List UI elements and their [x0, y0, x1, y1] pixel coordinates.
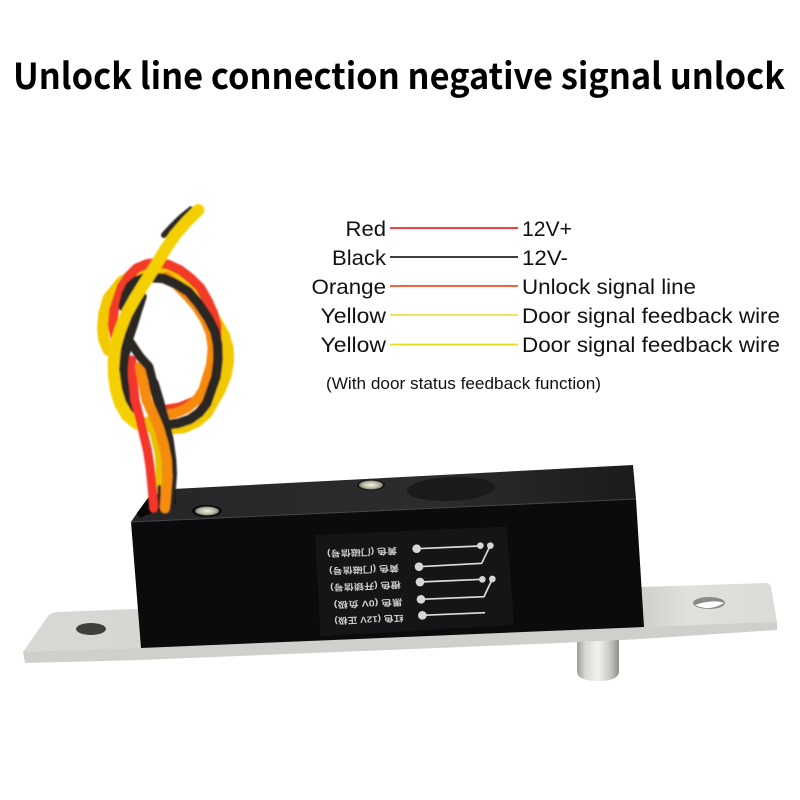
left mounting hole: [76, 623, 106, 635]
legend row: orange unlock signal line: Unlock signal line: [522, 275, 696, 299]
wiring legend: [312, 217, 780, 393]
legend row: yellow door signal feedback wire: Door signal feedback wire: [522, 304, 780, 328]
legend row: black 12V-: [332, 246, 568, 270]
top screw left: [192, 505, 222, 517]
black wire tip: [164, 209, 191, 235]
legend row: orange unlock signal line: [312, 275, 696, 299]
legend row: black 12V-: 12V-: [522, 246, 568, 270]
front top edge highlight: [131, 499, 636, 522]
legend row: yellow door signal feedback wire: [320, 304, 780, 328]
lock body: [131, 465, 644, 648]
top sensor window: [407, 475, 495, 503]
wire bundle: [103, 209, 228, 508]
black wire loop: [123, 278, 218, 425]
circuit traces: [417, 546, 492, 615]
label panel: [315, 527, 514, 636]
lower red strand: [132, 360, 154, 508]
upside-down Chinese wire labels: 黑色 (0V 负极): [334, 597, 403, 611]
circuit terminals: [412, 542, 496, 620]
legend row: yellow door signal feedback wire 2: Yellow: [320, 334, 387, 357]
legend row: yellow door signal feedback wire: Yellow: [320, 305, 387, 328]
top face: [131, 465, 636, 522]
legend row: red 12V+: Red: [346, 218, 386, 241]
upside-down Chinese wire labels: 黄色 (门磁信号): [327, 546, 397, 560]
mounting plate: [23, 583, 777, 663]
legend row: yellow door signal feedback wire 2: Door signal feedback wire: [522, 333, 780, 357]
black wire inner left strand: [123, 297, 142, 420]
yellow wire front strand: [114, 210, 198, 424]
lower orange strand: [140, 367, 167, 508]
upside-down Chinese wire labels: 黄色 (门磁信号): [329, 563, 399, 577]
legend note: (With door status feedback function): [326, 375, 601, 393]
red wire upper loop: [113, 263, 217, 337]
legend row: orange unlock signal line: Orange: [312, 276, 386, 299]
wiring diagram label: [315, 527, 514, 636]
wire entry hole: [137, 490, 176, 518]
red wire lower loop: [163, 390, 210, 410]
title: Unlock line connection negative signal unlock: [13, 48, 785, 100]
plate top surface: [23, 583, 777, 652]
lower black strand: [153, 383, 172, 500]
right mounting hole: [693, 597, 725, 609]
upside-down Chinese wire labels: 橙色 (开锁信号): [330, 580, 401, 594]
black crossing over the strands: [123, 343, 153, 383]
orange wire loop: [163, 277, 213, 415]
wire knot: [103, 210, 228, 429]
lower black divider: [154, 487, 164, 507]
plate front lip: [23, 622, 777, 663]
legend row: red 12V+: 12V+: [522, 217, 572, 241]
top screw right: [357, 480, 385, 490]
front face: [131, 499, 644, 648]
lower yellow strand: [148, 420, 159, 490]
upside-down Chinese wire labels: 红色 (12V 正极): [334, 613, 404, 627]
bolt pin: [577, 640, 619, 681]
legend row: red 12V+: [346, 217, 572, 241]
legend row: black 12V-: Black: [332, 247, 387, 270]
upside-down Chinese wire labels: [327, 546, 404, 627]
yellow wire outer loop: [103, 271, 228, 429]
legend row: yellow door signal feedback wire 2: [320, 333, 780, 357]
